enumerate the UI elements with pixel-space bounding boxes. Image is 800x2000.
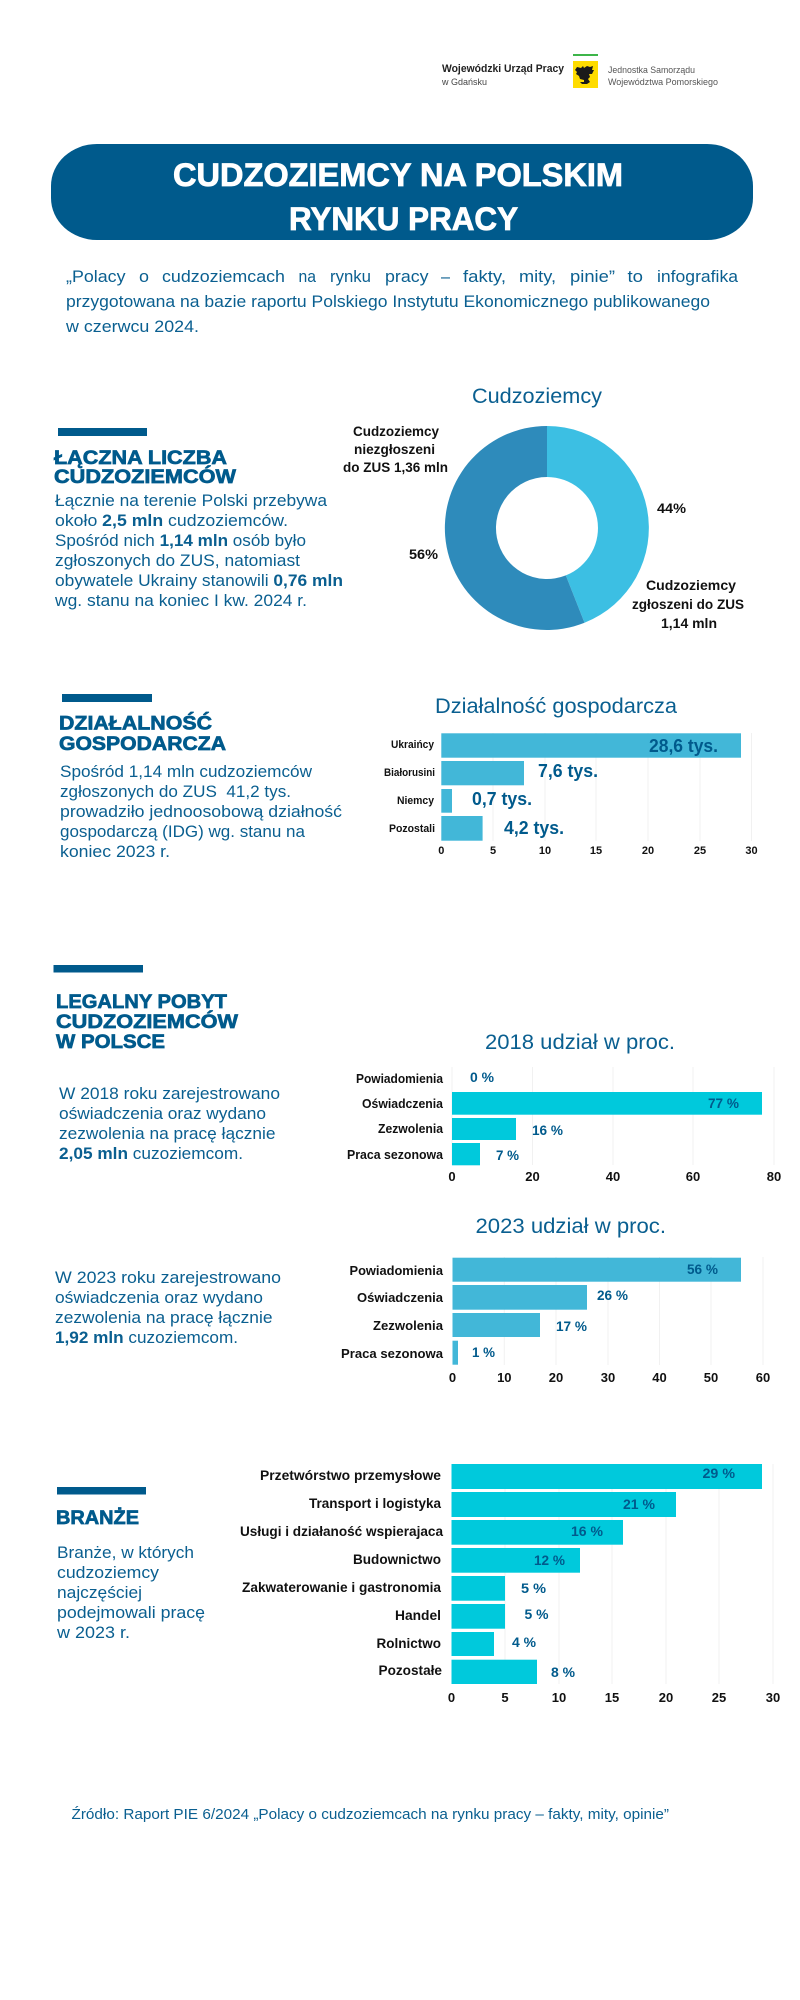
label: not registered: do ZUS 1,36 mln [343,459,448,475]
bars [441,733,741,841]
category labels [341,1264,444,1361]
source note: Źródło: Raport PIE 6/2024 „Polacy o cudzoziemcach na rynku pracy – fakty, mity, opinie” [72,1806,669,1823]
category labels: Oświadczenia [362,1097,444,1111]
body text: cudzoziemcy [57,1564,160,1582]
accent bar [58,428,147,436]
heading: GOSPODARCZA [59,733,226,755]
body text [56,1544,205,1642]
value labels: 77 % [708,1095,740,1111]
axis labels: 60 [756,1370,770,1385]
chart title: Działalność gospodarcza [435,695,677,718]
axis labels: 40 [652,1370,667,1385]
label: 44%: 44% [657,500,687,516]
body text 2018: W 2018 roku zarejestrowano [59,1085,280,1103]
body text 2023: zezwolenia na pracę łącznie [55,1309,272,1327]
heading [54,447,237,488]
value labels [470,1069,740,1163]
value labels: 17 % [556,1318,588,1334]
category labels: Handel [395,1608,441,1623]
label: registered: 1,14 mln [661,615,717,631]
body text 2018: 2,05 mln cuzoziemcom. [59,1145,243,1163]
category labels: Niemcy [397,795,435,807]
title banner: RYNKU PRACY [289,201,518,237]
category labels: Transport i logistyka [309,1496,441,1511]
category labels: Ukraińcy [391,739,435,751]
value labels: 16 % [532,1122,564,1138]
axis labels: 80 [767,1169,781,1184]
category labels: Zezwolenia [373,1319,444,1333]
section: business activity [59,694,342,861]
value labels: 12 % [534,1552,566,1568]
bars [452,1464,762,1684]
body text: gospodarczą (IDG) wg. stanu na [60,823,306,841]
value labels: 5 % [521,1580,547,1596]
body text: zgłoszonych do ZUS 41,2 tys. [60,783,291,801]
title banner [51,144,753,240]
axis labels: 0 [448,1169,456,1184]
category labels: Zakwaterowanie i gastronomia [242,1580,441,1595]
label: 56%: 56% [409,546,439,562]
body text: w 2023 r. [56,1624,130,1642]
body text: około 2,5 mln cudzoziemców. [55,512,288,530]
axis labels: 5 [501,1690,509,1705]
category labels: Budownictwo [353,1552,441,1567]
intro paragraph: infografika [657,268,739,286]
bars [452,1258,741,1365]
intro paragraph [65,268,739,336]
axis labels: 10 [552,1690,566,1705]
axis labels: 50 [704,1370,718,1385]
body text 2018: oświadczenia oraz wydano [59,1105,266,1123]
title banner: CUDZOZIEMCY NA POLSKIM [173,157,623,193]
body text [60,763,342,861]
axis labels: 30 [745,845,758,857]
label: not registered: Cudzoziemcy [353,423,439,439]
body text: koniec 2023 r. [60,843,170,861]
text: Wojewódzki Urząd Pracy: w Gdańsku [441,77,487,88]
accent bar [62,694,152,702]
intro paragraph: fakty, [463,268,506,286]
body text: zgłoszonych do ZUS, natomiast [55,552,300,570]
bars [452,1092,762,1165]
logos header [441,54,718,88]
category labels [384,739,435,835]
body text: wg. stanu na koniec I kw. 2024 r. [54,592,307,610]
heading: DZIAŁALNOŚĆ [59,710,212,734]
intro paragraph: cudzoziemcach [162,268,285,286]
heading [56,991,239,1053]
value labels: 1 % [472,1344,496,1360]
category labels: Zezwolenia [378,1122,444,1136]
axis labels [449,1370,770,1385]
axis labels: 20 [525,1169,540,1184]
category labels: Usługi i działaność wspierajaca [240,1524,443,1539]
axis labels: 60 [686,1169,700,1184]
body text 2023: oświadczenia oraz wydano [55,1289,263,1307]
value labels: 21 % [623,1496,656,1512]
value labels: 4,2 tys. [504,818,564,838]
intro paragraph: to [628,268,643,286]
axis labels: 40 [606,1169,620,1184]
intro paragraph: rynku [330,268,371,286]
heading: CUDZOZIEMCÓW [54,464,237,488]
label: registered: zgłoszeni do ZUS [632,596,744,612]
value labels: 7,6 tys. [538,761,598,781]
slice: registered 44% [547,426,649,623]
category labels: Rolnictwo [376,1636,441,1651]
intro paragraph: „Polacy [66,268,126,286]
chart title: Cudzoziemcy [472,385,603,408]
category labels: Powiadomienia [356,1072,444,1086]
category labels: Pozostali [389,823,435,835]
value labels: 4 % [512,1634,537,1650]
axis labels: 0 [448,1690,455,1705]
label: not registered: niezgłoszeni [354,441,435,457]
body text: Spośród nich 1,14 mln osób było [55,532,306,550]
heading: CUDZOZIEMCÓW [56,1009,239,1033]
axis labels: 0 [449,1370,456,1385]
value labels: 16 % [571,1523,604,1539]
text: Jednostka Samorządu: Województwa Pomorskiego [608,77,718,88]
value labels: 5 % [524,1606,549,1622]
chart: 2023 share [341,1215,770,1385]
axis labels: 30 [601,1370,615,1385]
axis labels [448,1690,780,1705]
axis labels: 20 [659,1690,673,1705]
accent bar [54,965,143,972]
slice: not registered 56% [445,426,584,630]
category labels: Praca sezonowa [341,1347,444,1361]
axis labels: 25 [694,845,706,857]
body text: podejmowali pracę [57,1604,205,1622]
value labels: 7 % [496,1147,520,1163]
body text 2018 [59,1085,280,1163]
value labels [472,736,718,838]
category labels: Pozostałe [378,1663,442,1678]
body text 2023: W 2023 roku zarejestrowano [55,1269,281,1287]
label: registered: Cudzoziemcy [646,577,736,593]
axis labels: 20 [642,845,654,857]
axis labels [438,845,758,857]
value labels: 0,7 tys. [472,789,532,809]
value labels: 29 % [702,1465,736,1481]
section: legal stay [54,965,280,1163]
value labels: 8 % [551,1664,576,1680]
body text: Łącznie na terenie Polski przebywa [55,492,328,510]
body text: Branże, w których [57,1544,194,1562]
axis labels: 0 [438,845,444,857]
heading [59,710,226,755]
axis labels: 20 [549,1370,563,1385]
category labels [240,1468,443,1678]
intro paragraph: w czerwcu 2024. [65,318,199,336]
chart: donut Cudzoziemcy [343,385,744,631]
label: not registered [343,423,448,475]
axis labels: 15 [590,845,602,857]
axis labels: 10 [539,845,551,857]
heading: LEGALNY POBYT [56,991,227,1013]
body text 2023 [55,1269,281,1347]
section: total number of foreigners [54,428,343,610]
intro paragraph: mity, [519,268,556,286]
accent bar [57,1487,146,1494]
section: industries [56,1487,205,1642]
value labels: 56 % [687,1261,719,1277]
body text 2023: 1,92 mln cuzoziemcom. [55,1329,238,1347]
category labels: Przetwórstwo przemysłowe [260,1468,441,1483]
text: Wojewódzki Urząd Pracy [441,63,565,88]
category labels [347,1072,444,1162]
intro paragraph: na [298,268,317,286]
intro paragraph: o [139,268,149,286]
body text: prowadziło jednoosobową działność [60,803,342,821]
axis labels: 25 [712,1690,726,1705]
value labels: 0 % [470,1069,495,1085]
chart title: 2023 udział w proc. [476,1215,666,1238]
value labels [512,1465,736,1680]
chart: business activity bars [384,695,758,857]
axis labels [448,1169,781,1184]
value labels [472,1261,719,1360]
chart title: 2018 udział w proc. [485,1031,675,1054]
axis labels: 30 [766,1690,780,1705]
chart: industries bars [240,1464,780,1705]
category labels: Białorusini [384,767,435,779]
body text: Spośród 1,14 mln cudzoziemców [60,763,312,781]
text: Jednostka Samorządu: Jednostka Samorządu [608,65,695,76]
body text: obywatele Ukrainy stanowili 0,76 mln [55,572,343,590]
body text [54,492,343,610]
text: Jednostka Samorządu [608,65,718,88]
value labels: 28,6 tys. [649,736,718,756]
value labels: 26 % [597,1287,629,1303]
heading: BRANŻE [56,1506,139,1529]
category labels: Powiadomienia [350,1264,444,1278]
intro paragraph: – [441,268,451,286]
intro paragraph: pinie” [570,268,615,286]
text: Wojewódzki Urząd Pracy: Wojewódzki Urząd Pracy [442,63,565,75]
chart: 2018 share [347,1031,781,1184]
axis labels: 5 [490,845,496,857]
axis labels: 10 [497,1370,512,1385]
icon: Pomorskie coat of arms [573,54,598,88]
body text 2018: zezwolenia na pracę łącznie [59,1125,276,1143]
heading: ŁĄCZNA LICZBA [54,447,227,469]
category labels: Oświadczenia [357,1291,444,1305]
category labels: Praca sezonowa [347,1148,444,1162]
label: registered [632,577,744,631]
axis labels: 15 [605,1690,619,1705]
heading: W POLSCE [56,1031,165,1053]
intro paragraph: przygotowana na bazie raportu Polskiego Instytutu Ekonomicznego publikowanego [66,293,710,311]
intro paragraph: pracy [385,268,429,286]
body text: najczęściej [57,1584,142,1602]
